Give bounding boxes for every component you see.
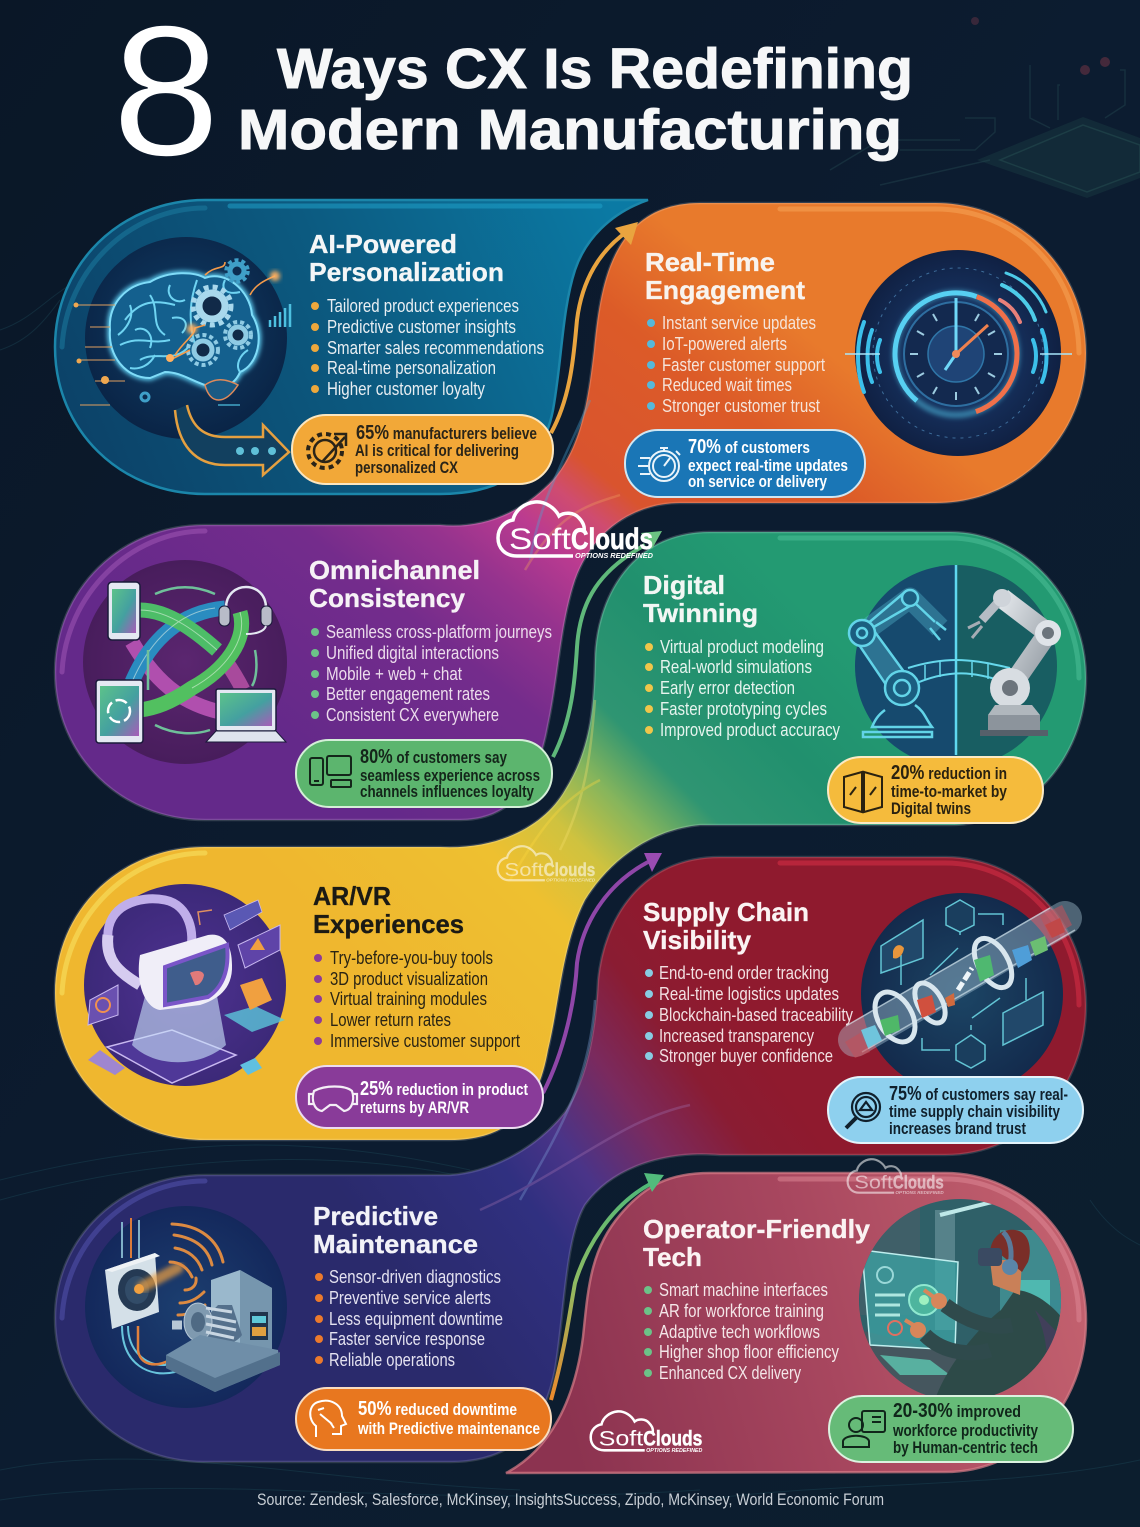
logo: SoftClouds main: Clouds bbox=[571, 523, 653, 556]
heading: Engagement bbox=[645, 275, 805, 305]
bullet list: Virtual product modeling bbox=[660, 636, 824, 657]
logo: SoftClouds watermark on operator panel bbox=[848, 1159, 944, 1195]
bullet list: Consistent CX everywhere bbox=[326, 704, 499, 725]
panel shape: AI personalization bbox=[55, 200, 648, 494]
logo: SoftClouds main: Soft bbox=[509, 523, 572, 556]
bullet list bbox=[645, 962, 854, 1066]
icon: laptop bbox=[206, 689, 286, 742]
arrow: green connector bbox=[553, 531, 662, 757]
stat badge: 20-30%: 20-30% improved bbox=[893, 1400, 1021, 1422]
logo: SoftClouds watermark on operator panel: Clouds bbox=[893, 1171, 944, 1192]
stat badge: 20-30%: workforce productivity bbox=[892, 1422, 1039, 1440]
bullet list: Higher shop floor efficiency bbox=[659, 1341, 840, 1362]
bullet list: IoT-powered alerts bbox=[662, 333, 787, 354]
panel shape: digital twinning flowing into AR/VR bbox=[55, 532, 1086, 1140]
heading: Tech bbox=[643, 1242, 702, 1272]
heading bbox=[643, 897, 809, 955]
heading: Twinning bbox=[643, 598, 758, 628]
stat badge: 80%: channels influences loyalty bbox=[360, 783, 535, 801]
bullet list bbox=[645, 636, 841, 740]
panel content: Predictive Maintenance bbox=[85, 1201, 551, 1450]
stat badge: 75% bbox=[828, 1077, 1083, 1143]
arrow: orange connector bbox=[551, 222, 638, 433]
heading: Digital bbox=[643, 570, 725, 600]
stat badge: 75%: increases brand trust bbox=[889, 1120, 1026, 1138]
icon: magnifier bbox=[846, 1093, 880, 1128]
bullet list: Smart machine interfaces bbox=[659, 1279, 828, 1300]
bullet list: Real-time personalization bbox=[327, 357, 496, 378]
stat badge: 20% reduction: Digital twins bbox=[891, 800, 971, 818]
bullet list: Higher customer loyalty bbox=[327, 378, 486, 399]
icon: glowing brain with gears bbox=[74, 237, 290, 439]
bullet list: Improved product accuracy bbox=[660, 719, 841, 740]
bullet list: Blockchain-based traceability bbox=[659, 1004, 854, 1025]
stat badge: 20% reduction bbox=[828, 757, 1043, 823]
bullet list bbox=[644, 1279, 840, 1383]
heading: Consistency bbox=[309, 583, 466, 613]
bullet list: Stronger customer trust bbox=[662, 395, 820, 416]
panel content: Supply Chain Visibility bbox=[643, 893, 1083, 1143]
bullet list: Faster prototyping cycles bbox=[660, 698, 827, 719]
icon: devices bbox=[310, 756, 351, 787]
bullet list: Real-time logistics updates bbox=[659, 983, 839, 1004]
heading: Supply Chain bbox=[643, 897, 809, 927]
bullet list: Predictive customer insights bbox=[327, 316, 516, 337]
title bbox=[112, 0, 913, 195]
stat badge: 70%: on service or delivery bbox=[688, 473, 828, 491]
arrow: purple connector bbox=[543, 853, 662, 1093]
bullet list: 3D product visualization bbox=[330, 968, 488, 989]
heading bbox=[309, 555, 480, 613]
stat badge: 65%: 65% manufacturers believe bbox=[356, 422, 537, 444]
stat badge: 65% bbox=[292, 415, 553, 484]
heading bbox=[313, 1201, 478, 1259]
logo: SoftClouds lower: Clouds bbox=[643, 1425, 702, 1450]
bullet list: Faster service response bbox=[329, 1328, 485, 1349]
heading: Experiences bbox=[313, 909, 464, 939]
stat badge: 20-30% bbox=[829, 1396, 1073, 1462]
bullet list: Instant service updates bbox=[662, 312, 816, 333]
bullet list bbox=[311, 621, 552, 725]
stat badge: 70%: expect real-time updates bbox=[688, 457, 848, 475]
bullet list bbox=[647, 312, 825, 416]
icon: connected devices bbox=[83, 560, 287, 764]
icon: supply chain tube bbox=[845, 893, 1075, 1095]
arrow: orange-green connector bbox=[551, 1173, 664, 1400]
heading: AR/VR bbox=[313, 881, 391, 911]
panel shape: supply chain flowing into predictive maintenance bbox=[55, 857, 1086, 1462]
bullet list: AR for workforce training bbox=[659, 1300, 824, 1321]
illustration: operator with holographic screen bbox=[859, 1199, 1061, 1395]
heading: AI-Powered bbox=[309, 229, 457, 259]
icon: VR headset bbox=[84, 884, 286, 1086]
stat badge: 70%: 70% of customers bbox=[688, 436, 810, 458]
bullet list: Smarter sales recommendations bbox=[327, 337, 544, 358]
stat badge: 25%: returns by AR/VR bbox=[360, 1099, 469, 1117]
logo: SoftClouds main: OPTIONS REDEFINED bbox=[575, 551, 654, 560]
stat badge: 20% reduction: time-to-market by bbox=[891, 783, 1008, 801]
heading: Real-Time bbox=[645, 247, 775, 277]
bullet list: Reliable operations bbox=[329, 1349, 455, 1370]
stat badge: 25%: 25% reduction in product bbox=[360, 1078, 528, 1100]
stat badge: 50%: 50% reduced downtime bbox=[358, 1398, 517, 1420]
icon: robot arm digital twin bbox=[849, 565, 1061, 767]
stat badge: 80%: seamless experience across bbox=[360, 767, 540, 785]
heading bbox=[643, 1214, 871, 1272]
heading: Visibility bbox=[643, 925, 752, 955]
stat badge: 50% bbox=[296, 1388, 551, 1450]
stat badge: 65%: personalized CX bbox=[355, 459, 458, 477]
title: Modern Manufacturing bbox=[238, 98, 902, 162]
bullet list: End-to-end order tracking bbox=[659, 962, 829, 983]
bullet list: Early error detection bbox=[660, 677, 795, 698]
logo: SoftClouds watermark on yellow panel bbox=[498, 846, 596, 884]
bullet list: Tailored product experiences bbox=[327, 295, 519, 316]
stat badge: 20-30%: by Human-centric tech bbox=[893, 1439, 1038, 1457]
bullet list: Unified digital interactions bbox=[326, 642, 499, 663]
panel content: Digital Twinning bbox=[643, 565, 1061, 823]
stat badge: 80%: 80% of customers say bbox=[360, 746, 508, 768]
logo: SoftClouds lower bbox=[591, 1411, 702, 1454]
heading: Predictive bbox=[313, 1201, 438, 1231]
stat badge: 70% bbox=[625, 430, 865, 497]
bullet list: Enhanced CX delivery bbox=[659, 1362, 802, 1383]
stat badge: 20% reduction: 20% reduction in bbox=[891, 762, 1007, 784]
heading: Maintenance bbox=[313, 1229, 478, 1259]
icon: glowing clock bbox=[845, 250, 1072, 456]
bullet list: Preventive service alerts bbox=[329, 1287, 491, 1308]
stat badge: 75%: 75% of customers say real- bbox=[889, 1083, 1068, 1105]
logo: SoftClouds watermark on yellow panel: Soft bbox=[505, 860, 544, 881]
bullet list bbox=[314, 947, 520, 1051]
bullet list: Real-world simulations bbox=[660, 656, 812, 677]
heading bbox=[309, 229, 504, 287]
heading: Personalization bbox=[309, 257, 504, 287]
logo: SoftClouds watermark on operator panel: Soft bbox=[854, 1171, 894, 1192]
logo: SoftClouds watermark on operator panel: OPTIONS REDEFINED bbox=[895, 1190, 944, 1195]
source line: Source: Zendesk, Salesforce, McKinsey, InsightsSuccess, Zipdo, McKinsey, World Economic Forum bbox=[257, 1490, 884, 1509]
stat badge: 50%: with Predictive maintenance bbox=[357, 1420, 540, 1438]
bullet list: Sensor-driven diagnostics bbox=[329, 1266, 501, 1287]
bullet list: Adaptive tech workflows bbox=[659, 1321, 820, 1342]
bullet list: Reduced wait times bbox=[662, 374, 792, 395]
logo: SoftClouds lower: Soft bbox=[599, 1425, 643, 1450]
bullet list: Stronger buyer confidence bbox=[659, 1045, 833, 1066]
icon: twin panels bbox=[844, 772, 882, 812]
icon: phone bbox=[108, 582, 140, 640]
icon: stopwatch bbox=[638, 448, 680, 481]
stat badge: 65%: AI is critical for delivering bbox=[355, 442, 519, 460]
bullet list: Virtual training modules bbox=[330, 988, 487, 1009]
panel content: Real-Time Engagement bbox=[625, 247, 1072, 497]
panel content: Omnichannel Consistency bbox=[83, 555, 552, 807]
bullet list bbox=[311, 295, 544, 399]
stat badge: 75%: time supply chain visibility bbox=[889, 1103, 1061, 1121]
stat badge: 25% bbox=[296, 1066, 543, 1128]
heading bbox=[313, 881, 464, 939]
bullet list: Increased transparency bbox=[659, 1025, 815, 1046]
bullet list bbox=[315, 1266, 503, 1370]
logo: SoftClouds main bbox=[498, 502, 654, 560]
title: Ways CX Is Redefining bbox=[277, 37, 913, 101]
icon: headset bbox=[219, 587, 272, 634]
icon: gear with arrow bbox=[308, 434, 346, 468]
logo: SoftClouds watermark on yellow panel: OPTIONS REDEFINED bbox=[546, 878, 596, 884]
heading: Operator-Friendly bbox=[643, 1214, 871, 1244]
icon: head with wrench bbox=[310, 1401, 346, 1437]
bullet list: Better engagement rates bbox=[326, 683, 490, 704]
bullet list: Immersive customer support bbox=[330, 1030, 520, 1051]
bullet list: Faster customer support bbox=[662, 354, 825, 375]
icon: outlined arrow toward stat bbox=[175, 405, 289, 475]
icon: tablet bbox=[96, 680, 143, 743]
logo: SoftClouds watermark on yellow panel: Clouds bbox=[544, 860, 595, 881]
heading: Omnichannel bbox=[309, 555, 480, 585]
icon: operator and screen bbox=[843, 1411, 885, 1447]
heading bbox=[643, 570, 758, 628]
panel content: Operator-Friendly Tech bbox=[643, 1195, 1073, 1462]
panel content: AR/VR Experiences bbox=[84, 881, 543, 1128]
panel content: AI-Powered Personalization bbox=[74, 229, 553, 484]
panel shape: real-time engagement flowing into omnichannel bbox=[55, 203, 1086, 820]
stat badge: 80% bbox=[296, 740, 552, 807]
bullet list: Try-before-you-buy tools bbox=[330, 947, 493, 968]
panel shape: operator-friendly tech bbox=[506, 1173, 1086, 1473]
icon: sensor and motor bbox=[85, 1206, 287, 1408]
bullet list: Lower return rates bbox=[330, 1009, 451, 1030]
bullet list: Mobile + web + chat bbox=[326, 663, 462, 684]
bullet list: Seamless cross-platform journeys bbox=[326, 621, 552, 642]
icon: VR goggles bbox=[309, 1086, 357, 1111]
heading bbox=[645, 247, 805, 305]
logo: SoftClouds lower: OPTIONS REDEFINED bbox=[646, 1448, 702, 1454]
bullet list: Less equipment downtime bbox=[329, 1308, 503, 1329]
